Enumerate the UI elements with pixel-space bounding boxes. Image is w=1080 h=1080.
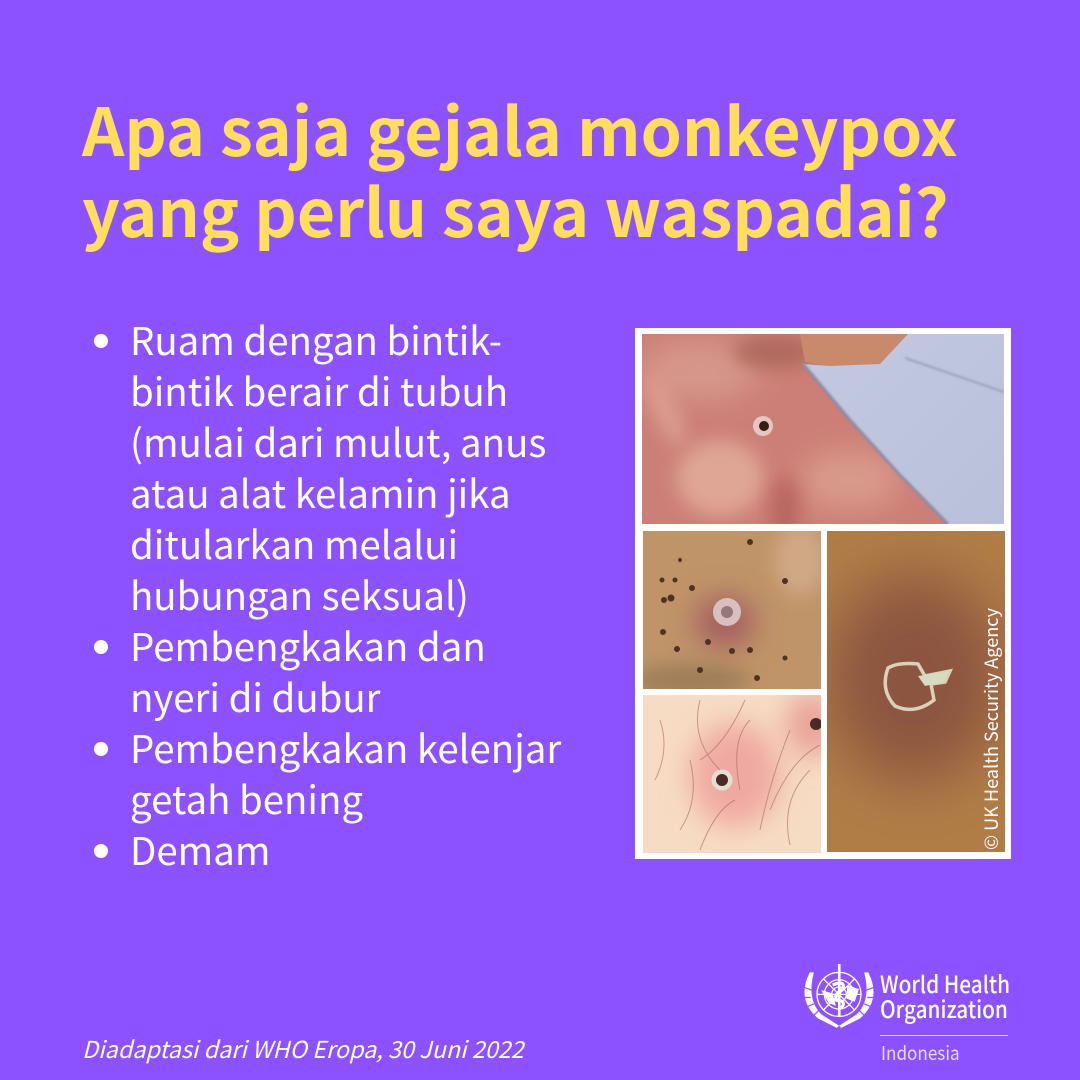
photo: lesion on hand [642,334,1004,524]
symptom list: bintik berair di tubuh [130,362,508,418]
text: World Health Organization: Organization [880,991,1008,1025]
photo: lesion on brown skin [827,531,1005,852]
symptom list: nyeri di dubur [130,668,381,724]
title [82,80,958,257]
text: Indonesia: Indonesia [881,1039,960,1066]
symptom list: ditularkan melalui [130,515,458,571]
photo collage [635,328,1011,859]
symptom list: atau alat kelamin jika [130,464,511,520]
source note: Diadaptasi dari WHO Eropa, 30 Juni 2022 [82,1031,524,1065]
symptom list: (mulai dari mulut, anus [130,413,546,469]
symptom list: Pembengkakan kelenjar [130,719,561,775]
symptom list: Ruam dengan bintik- [130,311,502,367]
symptom list: Demam [130,821,270,877]
text: World Health Organization [880,966,1010,1025]
symptom list: hubungan seksual) [130,566,469,622]
icon: WHO emblem [804,964,874,1028]
photo: lesion on tan skin [643,531,821,689]
photo: lesion on pale skin [643,693,838,853]
frame [635,328,1011,859]
title: Apa saja gejala monkeypox [82,80,958,176]
symptom list [94,311,562,877]
WHO logo [804,964,1010,1066]
photo credit: © UK Health Security Agency [978,607,1004,850]
symptom list: Pembengkakan dan [130,617,486,673]
title: yang perlu saya waspadai? [82,161,949,257]
symptom list: getah bening [130,770,363,826]
text: World Health Organization: World Health [880,966,1010,1000]
